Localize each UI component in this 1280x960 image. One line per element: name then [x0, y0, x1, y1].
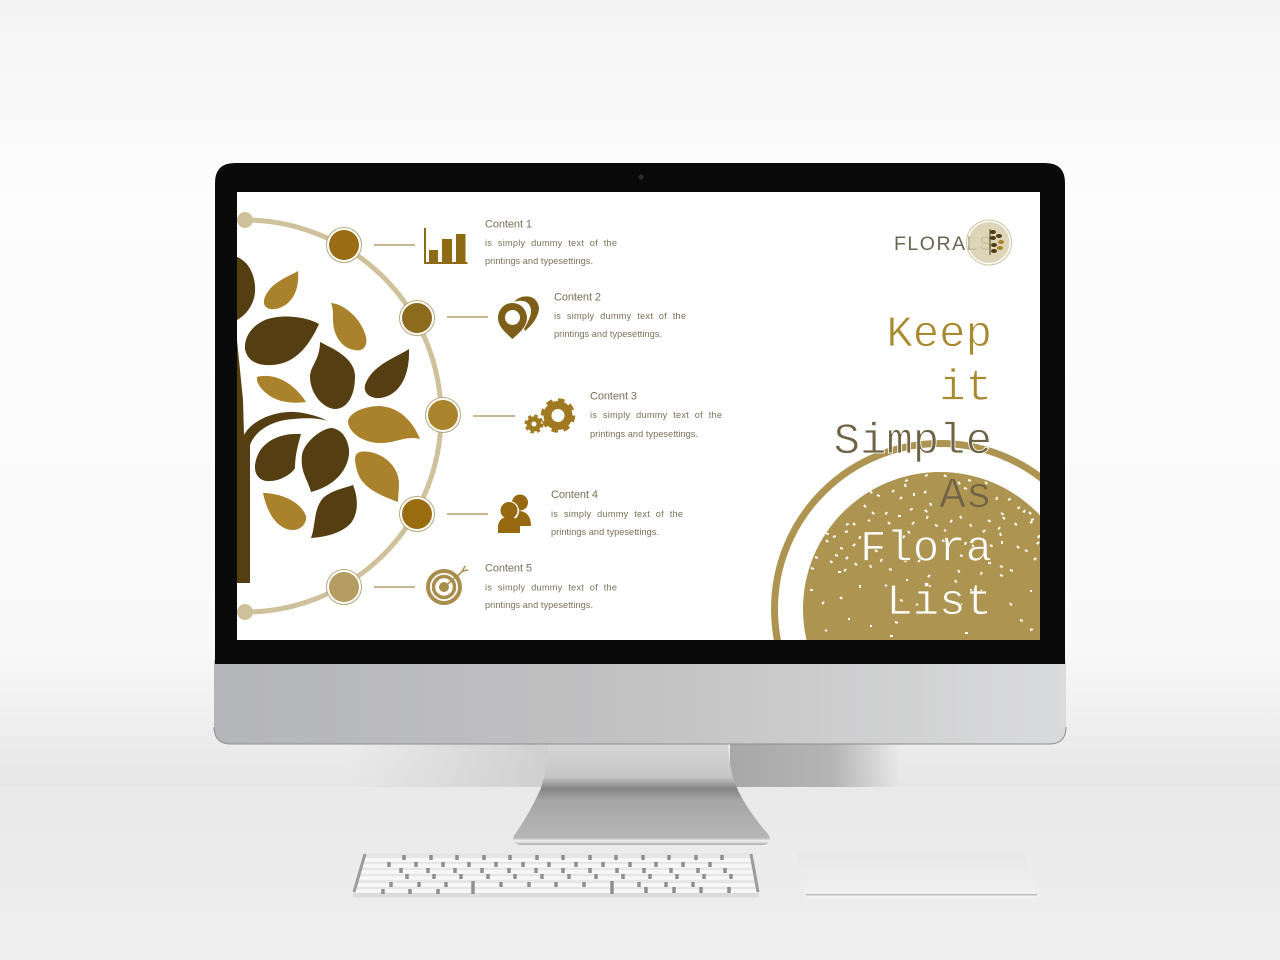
title: As [939, 471, 992, 521]
text: content 4 [551, 489, 683, 537]
logo sprig [990, 229, 1004, 255]
tree [237, 257, 420, 583]
monitor [214, 163, 1066, 744]
node 1 [326, 228, 362, 262]
text: content 4: printings and typesettings. [551, 527, 659, 537]
title: List [886, 578, 992, 628]
text: content 5 [485, 562, 617, 610]
icon: map pins [498, 296, 539, 339]
trunk and branch [237, 340, 328, 583]
title [834, 310, 992, 628]
camera [638, 174, 644, 180]
dark leaves [237, 257, 409, 538]
monitor stand [513, 744, 770, 845]
node 2 [400, 300, 434, 336]
text: content 1 [485, 218, 617, 266]
title: Flora [860, 524, 992, 574]
node 5 [326, 570, 362, 604]
node 4 [400, 496, 434, 532]
text: content 3: is simply dummy text of the [590, 410, 722, 420]
title: it [939, 364, 992, 414]
text: content 5: printings and typesettings. [485, 600, 593, 610]
text: content 2 [554, 292, 686, 339]
node 3 [426, 398, 460, 432]
text: content 3 [590, 390, 722, 439]
trackpad [797, 853, 1037, 898]
icon: bar chart [424, 228, 468, 264]
text: content 2: printings and typesettings. [554, 329, 662, 339]
screen [237, 192, 1040, 640]
text: content 2: Content 2 [554, 292, 601, 304]
icon: target [428, 566, 468, 603]
ring and speckled disc [771, 440, 1040, 640]
gold leaves [257, 271, 420, 530]
text: content 5: Content 5 [485, 562, 532, 574]
icon: gears [526, 400, 574, 432]
monitor chin [214, 660, 1066, 744]
text: content 4: is simply dummy text of the [551, 509, 683, 519]
icon: people [498, 494, 531, 533]
timeline arc [237, 212, 441, 620]
text: content 2: is simply dummy text of the [554, 311, 686, 321]
logo [894, 220, 1012, 265]
keyboard [353, 853, 759, 898]
text: content 4: Content 4 [551, 489, 598, 501]
text: content 1: Content 1 [485, 218, 532, 230]
logo: FLORALS [894, 233, 992, 255]
text: content 3: printings and typesettings. [590, 429, 698, 439]
connector lines [374, 245, 515, 587]
text: content 1: printings and typesettings. [485, 256, 593, 266]
text: content 5: is simply dummy text of the [485, 582, 617, 592]
slide content [237, 212, 1040, 640]
text: content 3: Content 3 [590, 390, 637, 402]
text: content 1: is simply dummy text of the [485, 238, 617, 248]
title: Keep [886, 310, 992, 360]
title: Simple [834, 417, 992, 467]
monitor bezel [215, 163, 1065, 664]
